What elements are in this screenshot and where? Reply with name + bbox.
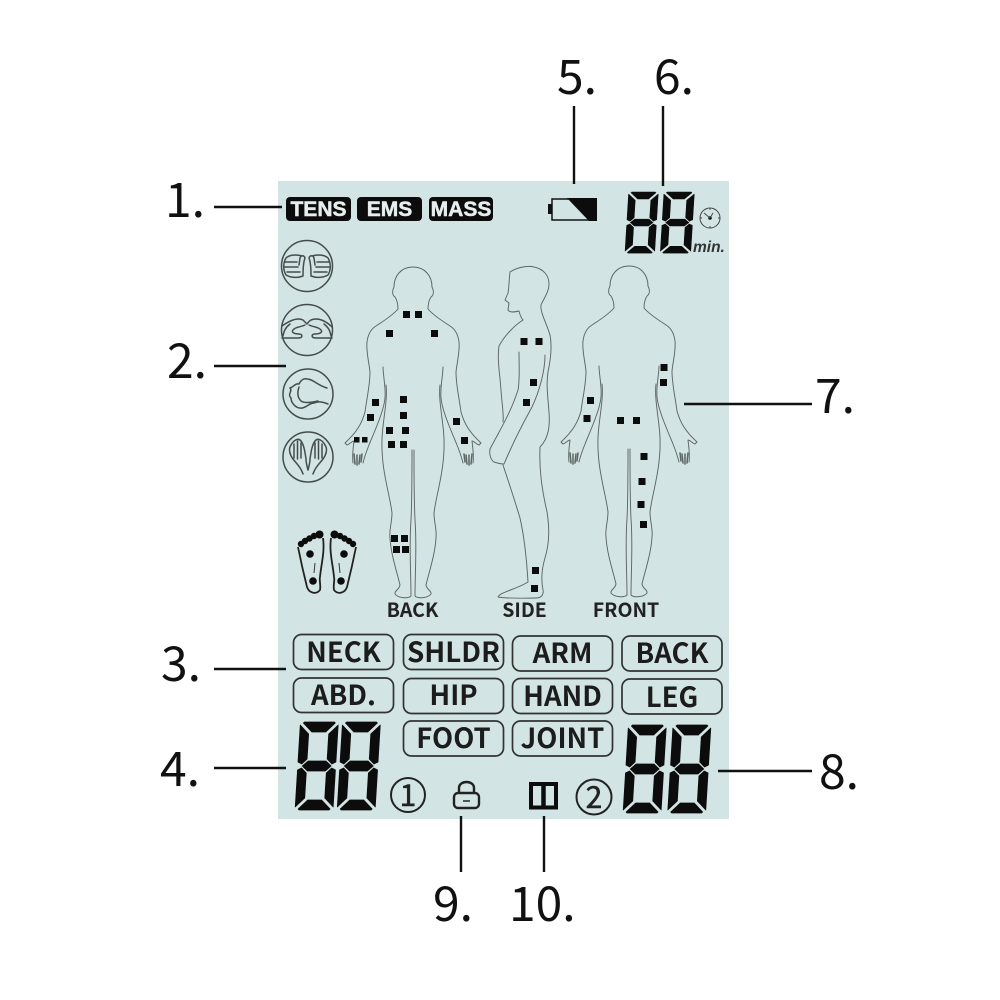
callout: 1.: [165, 161, 282, 231]
button: NECK: NECK: [306, 630, 381, 670]
mode pill: EMS: [357, 197, 422, 221]
button: LEG: [622, 675, 722, 715]
callout: 2.: [167, 322, 286, 392]
icon: clock: [700, 208, 720, 228]
button: ARM: ARM: [532, 631, 592, 671]
button: ARM: [512, 631, 612, 671]
mode pill: TENS: TENS: [290, 198, 347, 221]
left channel digits: [295, 722, 380, 810]
button: LEG: LEG: [646, 675, 698, 715]
callout: 9.: [433, 816, 473, 935]
icon: fist: [283, 369, 333, 419]
button: HIP: HIP: [429, 673, 478, 713]
callout: 9.: 9.: [433, 865, 473, 935]
right channel digits: [623, 725, 711, 813]
figure: front view: [561, 266, 697, 597]
view label: FRONT: FRONT: [593, 594, 659, 623]
icon: channel 1: 1: [400, 771, 416, 815]
icon: battery: [548, 198, 597, 221]
panel: LCD background: [278, 181, 729, 819]
icon: channel 2: [576, 773, 612, 817]
button: SHLDR: SHLDR: [407, 630, 500, 670]
figure: side view: [490, 266, 551, 598]
callout: 10.: 10.: [509, 865, 576, 935]
icon: kneading hands: [282, 240, 332, 292]
callout: 8.: 8.: [819, 733, 859, 803]
icon: channel 2: 2: [586, 773, 602, 817]
button: BACK: BACK: [636, 631, 709, 671]
callout: 7.: 7.: [815, 357, 855, 427]
view label: BACK: BACK: [387, 594, 439, 623]
icon: squeezing hands: [282, 304, 332, 356]
button: FOOT: FOOT: [416, 716, 491, 756]
callout: 5.: 5.: [557, 38, 597, 108]
callout: 4.: 4.: [160, 730, 200, 800]
icon: lock: [454, 782, 479, 808]
view label: SIDE: SIDE: [502, 594, 547, 623]
button: HIP: [404, 673, 504, 714]
callout: 1.: 1.: [165, 161, 205, 231]
unit: min.: min.: [693, 239, 725, 256]
icon: open hands: [283, 432, 333, 482]
mode pill: EMS: EMS: [367, 198, 412, 221]
icon: pause: [531, 783, 556, 808]
figure: back view: [345, 267, 481, 598]
mode pill: MASS: MASS: [431, 198, 491, 221]
callout: 6.: 6.: [654, 38, 694, 108]
button: JOINT: JOINT: [521, 716, 604, 756]
callout: 4.: [160, 730, 286, 800]
callout: 3.: 3.: [161, 625, 201, 695]
button: ABD.: [294, 673, 394, 713]
button: ABD.: ABD.: [310, 673, 376, 713]
callout: 2.: 2.: [167, 322, 207, 392]
timer digits: [625, 192, 694, 253]
callout: 10.: [509, 816, 576, 935]
callout: 3.: [161, 625, 286, 695]
icon: feet: [298, 530, 356, 593]
icon: channel 1: [391, 771, 425, 815]
button: HAND: HAND: [523, 674, 602, 714]
